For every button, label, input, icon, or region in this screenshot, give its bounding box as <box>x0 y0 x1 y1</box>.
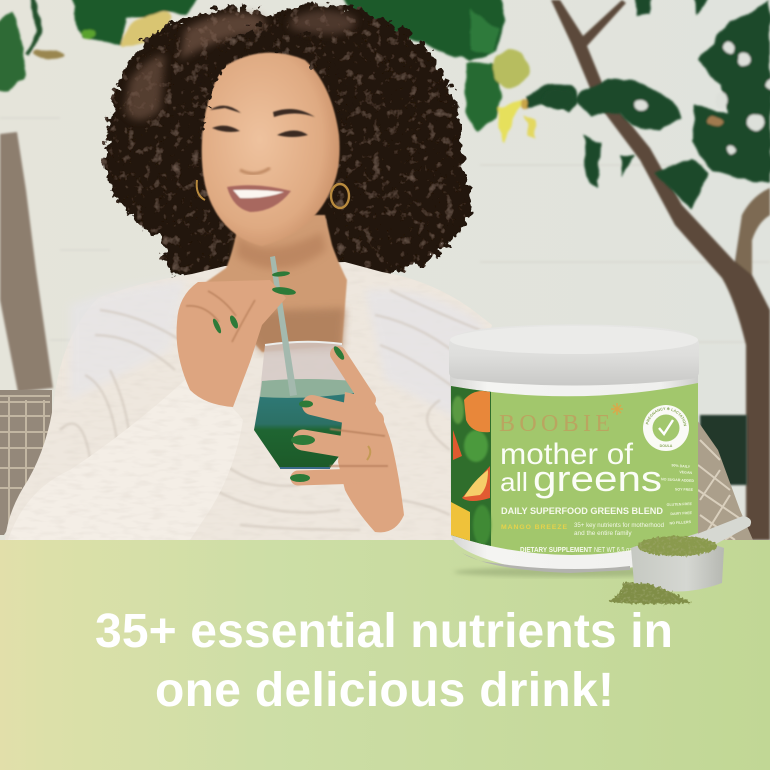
certification badge <box>643 405 689 451</box>
product descriptor: DAILY SUPERFOOD GREENS BLEND <box>501 506 663 517</box>
brand wordmark: BOOBIE <box>499 411 610 437</box>
measuring scoop with powder <box>631 516 751 592</box>
hoop earrings <box>197 180 349 208</box>
shoulder shading <box>70 280 185 400</box>
smile <box>227 185 291 212</box>
flavour: MANGO BREEZE <box>501 524 567 531</box>
left hand holding straw <box>177 280 286 407</box>
headline: 35+ essential nutrients in <box>95 605 673 658</box>
side claims list: NO FILLERS <box>669 520 692 525</box>
label: NET WT 6.5 oz <box>594 545 632 554</box>
bottom green panel <box>0 540 770 770</box>
nutrient claim: 35+ key nutrients for motherhood <box>574 522 664 529</box>
right tree trunk and branches <box>551 0 770 540</box>
supplement line: DIETARY SUPPLEMENT <box>520 545 592 554</box>
foliage: right tree <box>542 0 770 208</box>
jar body <box>450 375 698 572</box>
side claims list: NO SUGAR ADDED <box>661 477 695 483</box>
chest shadow <box>225 308 345 352</box>
chunky sleeve cuff <box>8 380 243 540</box>
brows <box>210 106 315 117</box>
powder pile <box>609 582 692 604</box>
right hand around glass <box>298 354 404 532</box>
label: all <box>500 467 528 497</box>
left hand finger creases <box>186 291 255 342</box>
jaw shadow on neck <box>236 232 326 269</box>
fingernails: green <box>211 271 346 482</box>
jar lid <box>449 324 699 386</box>
ring <box>367 446 370 460</box>
jar shadow <box>454 567 690 577</box>
left tree trunk <box>0 132 53 392</box>
drinking straw <box>270 256 297 396</box>
side claims list: VEGAN <box>679 470 693 475</box>
sweater cable knit lines <box>60 290 480 530</box>
side claims list: DAIRY FREE <box>670 511 693 516</box>
product name: mother of <box>500 438 634 471</box>
hair <box>106 4 472 280</box>
neck and chest <box>206 215 347 352</box>
hair strands framing face <box>196 28 352 130</box>
photo background: white brick wall <box>0 0 770 545</box>
wicker chair: right <box>697 420 753 540</box>
product jar <box>449 326 699 573</box>
glass of green drink <box>254 342 358 468</box>
headline <box>95 605 673 717</box>
certification badge: DOULA <box>660 444 673 448</box>
woman <box>5 4 492 540</box>
side claims list: SOY FREE <box>675 487 694 492</box>
foliage: top centre with lemon and blossom <box>340 0 578 142</box>
certification badge: PREGNANCY ✻ LACTATION <box>646 407 686 426</box>
face <box>202 53 340 246</box>
right hand finger gaps <box>330 429 388 466</box>
label: and the entire family <box>574 530 632 537</box>
side claims list: 90% DAILY <box>671 463 691 469</box>
side claims list: GLUTEN FREE <box>667 502 693 507</box>
wicker chair: left <box>0 390 52 535</box>
sweater <box>5 262 492 540</box>
headline: one delicious drink! <box>155 664 614 717</box>
eyes <box>212 126 308 137</box>
label <box>451 383 698 555</box>
label fruit and spinach art <box>451 385 491 555</box>
brand sun mark <box>611 403 623 415</box>
side claims list <box>661 463 695 525</box>
nose shadow <box>240 168 270 174</box>
foliage: top left <box>0 0 200 94</box>
dark hedge behind chair <box>700 415 747 485</box>
label: greens <box>533 458 662 499</box>
